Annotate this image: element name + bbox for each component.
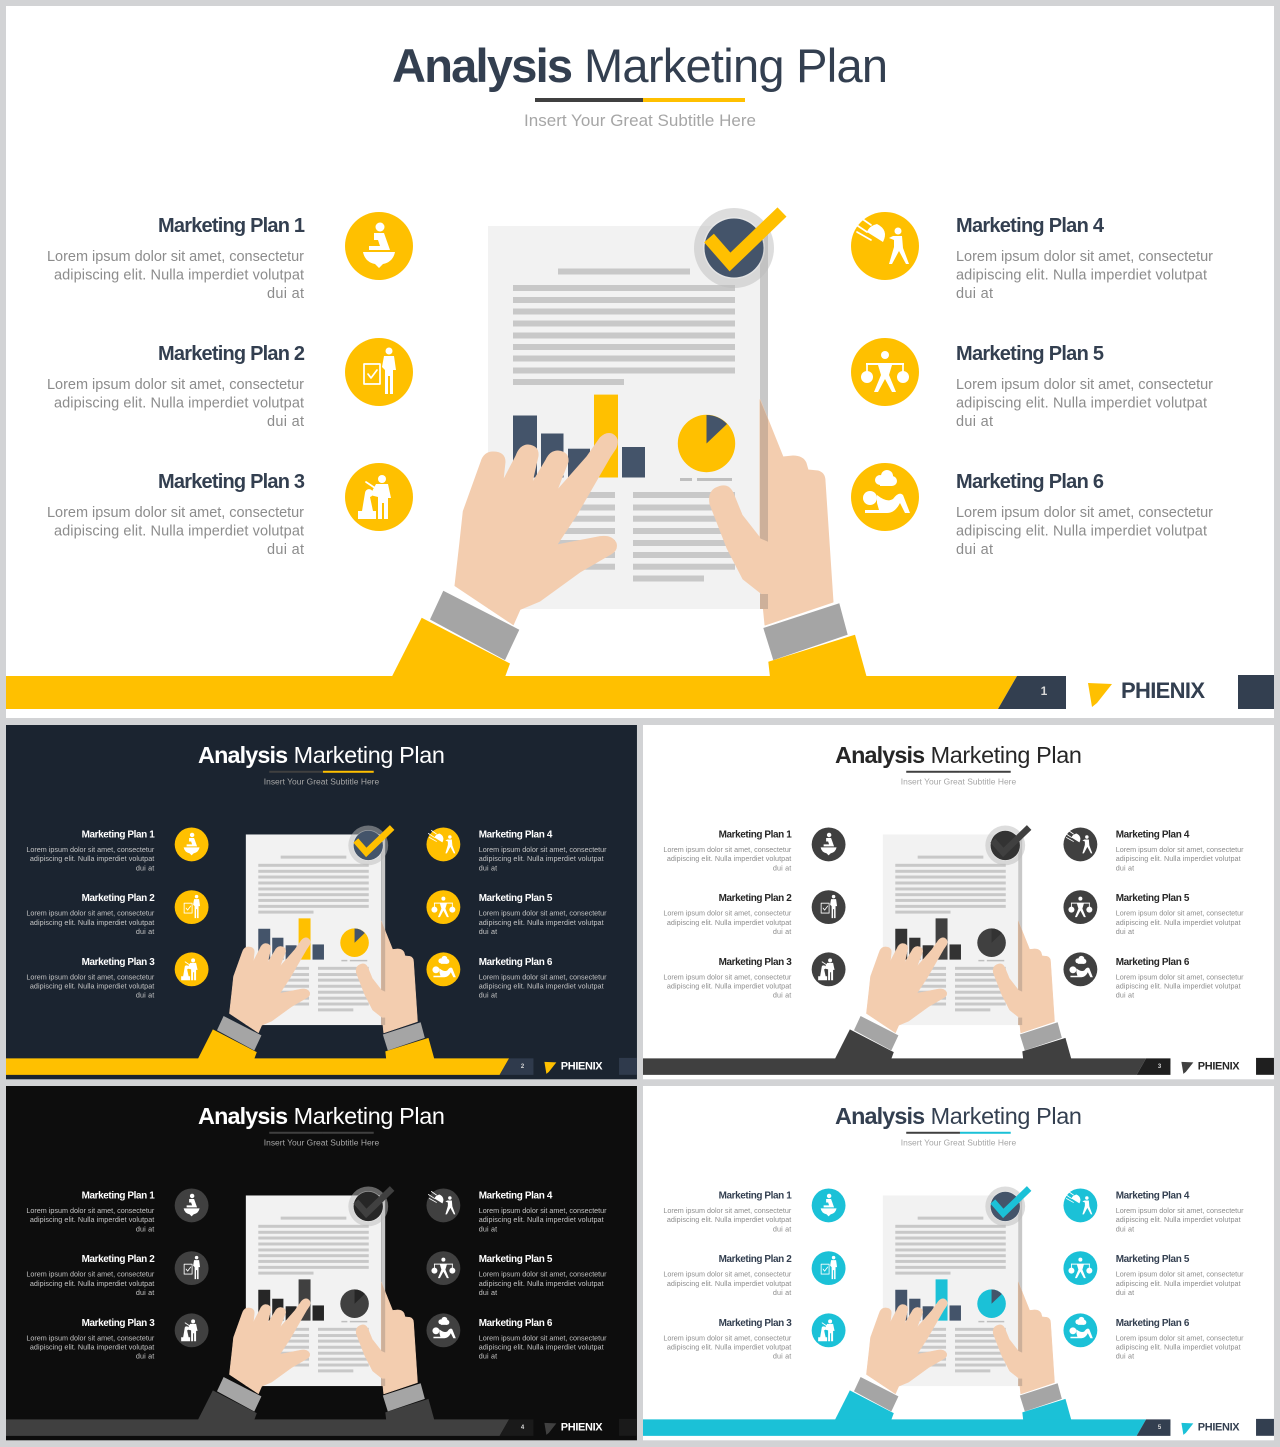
- item: Marketing Plan 6: dui at: [479, 1352, 497, 1361]
- item: Marketing Plan 4: dui at: [479, 863, 497, 872]
- pie chart: [678, 415, 735, 481]
- item: Marketing Plan 2: adipiscing elit. Nulla imperdiet volutpat: [30, 918, 154, 927]
- item: Marketing Plan 1: Lorem ipsum dolor sit amet, consectetur: [663, 1206, 792, 1215]
- item: Marketing Plan 1: [47, 215, 305, 302]
- item: Marketing Plan 2: [47, 343, 305, 430]
- item: Marketing Plan 2: Marketing Plan 2: [82, 893, 155, 904]
- item: Marketing Plan 2: adipiscing elit. Nulla imperdiet volutpat: [54, 396, 304, 412]
- item: Marketing Plan 5: dui at: [1116, 1288, 1134, 1297]
- illustration: document held by two hands: [835, 1187, 1071, 1420]
- item: Marketing Plan 3: adipiscing elit. Nulla imperdiet volutpat: [667, 981, 791, 990]
- title: Marketing Plan: [931, 1103, 1082, 1129]
- icon: plan 1: [345, 212, 413, 280]
- document text lines: [513, 268, 735, 385]
- title: Analysis: [835, 1103, 925, 1129]
- item: Marketing Plan 6: Lorem ipsum dolor sit amet, consectetur: [479, 1333, 607, 1342]
- item: Marketing Plan 5: adipiscing elit. Nulla imperdiet volutpat: [1116, 918, 1241, 927]
- logo mark: [544, 1423, 556, 1435]
- icon: plan 4: [1063, 828, 1097, 861]
- icon: plan 4: [851, 212, 919, 280]
- item: Marketing Plan 5: [1116, 1254, 1244, 1297]
- item: Marketing Plan 4: [479, 1190, 607, 1233]
- item: Marketing Plan 3: [26, 957, 155, 1000]
- document lower columns: [513, 492, 735, 582]
- item: Marketing Plan 3: adipiscing elit. Nulla imperdiet volutpat: [30, 1342, 154, 1351]
- footer page tab: [1137, 1058, 1170, 1075]
- footer bar: [643, 1058, 1146, 1075]
- title underline: [906, 771, 1011, 773]
- title: Marketing Plan: [294, 742, 445, 768]
- item: Marketing Plan 1: dui at: [136, 863, 154, 872]
- icon: plan 5: [851, 338, 919, 406]
- item: Marketing Plan 1: Lorem ipsum dolor sit amet, consectetur: [663, 845, 792, 854]
- item: Marketing Plan 2: Marketing Plan 2: [82, 1254, 155, 1265]
- item: Marketing Plan 4: adipiscing elit. Nulla imperdiet volutpat: [479, 1215, 604, 1224]
- subtitle: Insert Your Great Subtitle Here: [264, 1138, 379, 1148]
- item: Marketing Plan 4: adipiscing elit. Nulla imperdiet volutpat: [956, 268, 1207, 284]
- item: Marketing Plan 2: Lorem ipsum dolor sit amet, consectetur: [26, 1270, 155, 1279]
- icon: plan 3: [812, 952, 846, 986]
- item: Marketing Plan 2: [26, 893, 155, 936]
- item: Marketing Plan 2: Lorem ipsum dolor sit amet, consectetur: [26, 909, 155, 918]
- footer bar: [6, 1419, 509, 1436]
- item: Marketing Plan 1: Marketing Plan 1: [82, 1190, 155, 1201]
- footer corner block: [1256, 1419, 1274, 1436]
- icon: plan 5: [426, 890, 460, 924]
- title: Analysis: [835, 742, 925, 768]
- item: Marketing Plan 6: Lorem ipsum dolor sit amet, consectetur: [1116, 1333, 1244, 1342]
- title underline: [535, 98, 745, 102]
- logo text: PHIENIX: [1198, 1421, 1240, 1433]
- item: Marketing Plan 4: adipiscing elit. Nulla imperdiet volutpat: [479, 854, 604, 863]
- item: Marketing Plan 6: adipiscing elit. Nulla imperdiet volutpat: [1116, 981, 1241, 990]
- item: Marketing Plan 1: [663, 829, 792, 872]
- item: Marketing Plan 4: Lorem ipsum dolor sit amet, consectetur: [479, 1206, 607, 1215]
- item: Marketing Plan 3: Lorem ipsum dolor sit amet, consectetur: [47, 505, 304, 521]
- footer bar: [6, 676, 1017, 709]
- item: Marketing Plan 5: Lorem ipsum dolor sit amet, consectetur: [1116, 1270, 1244, 1279]
- item: Marketing Plan 4: Lorem ipsum dolor sit amet, consectetur: [956, 249, 1213, 265]
- title: Marketing Plan: [294, 1103, 445, 1129]
- item: Marketing Plan 1: dui at: [136, 1224, 154, 1233]
- item: Marketing Plan 4: Marketing Plan 4: [956, 215, 1105, 237]
- logo mark: [1181, 1423, 1193, 1435]
- item: Marketing Plan 3: adipiscing elit. Nulla imperdiet volutpat: [54, 524, 304, 540]
- item: Marketing Plan 6: [956, 471, 1213, 558]
- check badge: [694, 208, 782, 288]
- item: Marketing Plan 1: Marketing Plan 1: [158, 215, 305, 237]
- title: [198, 742, 445, 768]
- illustration: document held by two hands: [198, 826, 434, 1059]
- item: Marketing Plan 4: [956, 215, 1213, 302]
- item: Marketing Plan 3: Marketing Plan 3: [158, 471, 305, 493]
- item: Marketing Plan 5: [479, 1254, 607, 1297]
- item: Marketing Plan 1: dui at: [267, 286, 304, 302]
- icon: plan 4: [426, 828, 460, 861]
- item: Marketing Plan 3: dui at: [773, 1352, 791, 1361]
- item: Marketing Plan 2: [663, 893, 792, 936]
- logo mark: [1088, 683, 1112, 707]
- item: Marketing Plan 6: adipiscing elit. Nulla imperdiet volutpat: [1116, 1342, 1241, 1351]
- item: Marketing Plan 6: Lorem ipsum dolor sit amet, consectetur: [479, 972, 607, 981]
- item: Marketing Plan 5: dui at: [479, 927, 497, 936]
- icon: plan 1: [812, 1189, 846, 1222]
- icon: plan 2: [345, 338, 413, 406]
- item: Marketing Plan 4: Marketing Plan 4: [479, 829, 553, 840]
- item: Marketing Plan 5: [1116, 893, 1244, 936]
- item: Marketing Plan 5: [479, 893, 607, 936]
- logo text: PHIENIX: [561, 1060, 603, 1072]
- item: Marketing Plan 4: dui at: [479, 1224, 497, 1233]
- title underline: [269, 771, 374, 773]
- logo text: PHIENIX: [561, 1421, 603, 1433]
- item: Marketing Plan 3: Lorem ipsum dolor sit amet, consectetur: [26, 1333, 155, 1342]
- icon: plan 5: [1063, 890, 1097, 924]
- item: Marketing Plan 5: dui at: [1116, 927, 1134, 936]
- icon: plan 5: [1063, 1251, 1097, 1285]
- item: Marketing Plan 5: Lorem ipsum dolor sit amet, consectetur: [956, 377, 1213, 393]
- item: Marketing Plan 5: dui at: [479, 1288, 497, 1297]
- item: Marketing Plan 2: adipiscing elit. Nulla imperdiet volutpat: [30, 1279, 154, 1288]
- item: Marketing Plan 6: Marketing Plan 6: [1116, 957, 1190, 968]
- icon: plan 1: [175, 828, 209, 861]
- item: Marketing Plan 3: Marketing Plan 3: [82, 1318, 155, 1329]
- illustration: document held by two hands: [198, 1187, 434, 1420]
- page number: 3: [1158, 1064, 1162, 1070]
- item: Marketing Plan 4: dui at: [1116, 863, 1134, 872]
- icon: plan 6: [426, 1313, 460, 1347]
- item: Marketing Plan 3: Lorem ipsum dolor sit amet, consectetur: [663, 1333, 792, 1342]
- footer bar: [6, 1058, 509, 1075]
- item: Marketing Plan 5: adipiscing elit. Nulla imperdiet volutpat: [479, 918, 604, 927]
- item: Marketing Plan 3: Lorem ipsum dolor sit amet, consectetur: [26, 972, 155, 981]
- item: Marketing Plan 1: [26, 829, 155, 872]
- footer bar: [643, 1419, 1146, 1436]
- item: Marketing Plan 2: Lorem ipsum dolor sit amet, consectetur: [663, 909, 792, 918]
- item: Marketing Plan 4: Lorem ipsum dolor sit amet, consectetur: [1116, 845, 1244, 854]
- item: Marketing Plan 5: adipiscing elit. Nulla imperdiet volutpat: [956, 396, 1207, 412]
- item: Marketing Plan 1: adipiscing elit. Nulla imperdiet volutpat: [667, 1215, 791, 1224]
- item: Marketing Plan 5: adipiscing elit. Nulla imperdiet volutpat: [479, 1279, 604, 1288]
- icon: plan 3: [175, 952, 209, 986]
- footer corner block: [1256, 1058, 1274, 1075]
- item: Marketing Plan 6: adipiscing elit. Nulla imperdiet volutpat: [956, 524, 1207, 540]
- item: Marketing Plan 6: Marketing Plan 6: [479, 1318, 553, 1329]
- right hand: [710, 400, 833, 625]
- item: Marketing Plan 5: Marketing Plan 5: [1116, 1254, 1190, 1265]
- item: Marketing Plan 6: dui at: [1116, 1352, 1134, 1361]
- item: Marketing Plan 4: dui at: [956, 286, 993, 302]
- subtitle: Insert Your Great Subtitle Here: [901, 1138, 1016, 1148]
- item: Marketing Plan 5: Lorem ipsum dolor sit amet, consectetur: [479, 1270, 607, 1279]
- title: Marketing Plan: [931, 742, 1082, 768]
- item: Marketing Plan 4: adipiscing elit. Nulla imperdiet volutpat: [1116, 1215, 1241, 1224]
- item: Marketing Plan 3: [47, 471, 305, 558]
- logo mark: [544, 1062, 556, 1074]
- item: Marketing Plan 6: Marketing Plan 6: [956, 471, 1104, 493]
- item: Marketing Plan 1: Marketing Plan 1: [82, 829, 155, 840]
- item: Marketing Plan 2: [663, 1254, 792, 1297]
- item: Marketing Plan 4: [1116, 1190, 1244, 1233]
- item: Marketing Plan 3: Marketing Plan 3: [82, 957, 155, 968]
- title underline: [906, 1132, 1011, 1134]
- item: Marketing Plan 6: [479, 957, 607, 1000]
- item: Marketing Plan 3: adipiscing elit. Nulla imperdiet volutpat: [667, 1342, 791, 1351]
- title: Analysis: [392, 39, 573, 92]
- footer page tab: [500, 1058, 533, 1075]
- item: Marketing Plan 3: Marketing Plan 3: [719, 957, 792, 968]
- item: Marketing Plan 3: dui at: [136, 1352, 154, 1361]
- item: Marketing Plan 4: Marketing Plan 4: [479, 1190, 553, 1201]
- illustration: document held by two hands: [392, 208, 867, 677]
- item: Marketing Plan 6: Lorem ipsum dolor sit amet, consectetur: [1116, 972, 1244, 981]
- item: Marketing Plan 6: adipiscing elit. Nulla imperdiet volutpat: [479, 1342, 604, 1351]
- icon: plan 3: [812, 1313, 846, 1347]
- item: Marketing Plan 3: dui at: [267, 542, 304, 558]
- item: Marketing Plan 4: Lorem ipsum dolor sit amet, consectetur: [1116, 1206, 1244, 1215]
- icon: plan 6: [1063, 952, 1097, 986]
- item: Marketing Plan 5: [956, 343, 1213, 430]
- item: Marketing Plan 1: Lorem ipsum dolor sit amet, consectetur: [26, 845, 155, 854]
- item: Marketing Plan 6: Marketing Plan 6: [1116, 1318, 1190, 1329]
- right shirt cuff: [763, 603, 848, 660]
- title underline: [269, 1132, 374, 1134]
- footer corner block: [1238, 675, 1274, 709]
- item: Marketing Plan 5: Marketing Plan 5: [479, 1254, 553, 1265]
- title: Analysis: [198, 1103, 288, 1129]
- item: Marketing Plan 3: adipiscing elit. Nulla imperdiet volutpat: [30, 981, 154, 990]
- item: Marketing Plan 3: [663, 1318, 792, 1361]
- item: Marketing Plan 4: adipiscing elit. Nulla imperdiet volutpat: [1116, 854, 1241, 863]
- page number: 1: [1041, 684, 1048, 698]
- icon: plan 6: [851, 463, 919, 531]
- icon: plan 1: [812, 828, 846, 861]
- subtitle: Insert Your Great Subtitle Here: [524, 111, 756, 130]
- logo text: PHIENIX: [1198, 1060, 1240, 1072]
- item: Marketing Plan 5: Lorem ipsum dolor sit amet, consectetur: [1116, 909, 1244, 918]
- item: Marketing Plan 4: Marketing Plan 4: [1116, 829, 1190, 840]
- illustration: document held by two hands: [835, 826, 1071, 1059]
- subtitle: Insert Your Great Subtitle Here: [264, 777, 379, 787]
- icon: plan 2: [175, 890, 209, 924]
- item: Marketing Plan 1: dui at: [773, 1224, 791, 1233]
- item: Marketing Plan 2: Lorem ipsum dolor sit amet, consectetur: [47, 377, 304, 393]
- right sleeve: [768, 635, 867, 677]
- icon: plan 2: [812, 1251, 846, 1285]
- item: Marketing Plan 3: Marketing Plan 3: [719, 1318, 792, 1329]
- item: Marketing Plan 4: Marketing Plan 4: [1116, 1190, 1190, 1201]
- footer page tab: [1137, 1419, 1170, 1436]
- slide 2: yellow on navy: [6, 725, 637, 1079]
- item: Marketing Plan 2: dui at: [136, 927, 154, 936]
- footer page tab: [500, 1419, 533, 1436]
- item: Marketing Plan 6: [479, 1318, 607, 1361]
- item: Marketing Plan 4: [479, 829, 607, 872]
- icon: plan 3: [175, 1313, 209, 1347]
- item: Marketing Plan 6: Lorem ipsum dolor sit amet, consectetur: [956, 505, 1213, 521]
- icon: plan 6: [1063, 1313, 1097, 1347]
- item: Marketing Plan 4: Lorem ipsum dolor sit amet, consectetur: [479, 845, 607, 854]
- left shirt cuff: [430, 591, 519, 660]
- item: Marketing Plan 2: dui at: [136, 1288, 154, 1297]
- icon: plan 4: [426, 1189, 460, 1222]
- item: Marketing Plan 4: [1116, 829, 1244, 872]
- bar chart: [513, 395, 645, 478]
- icon: plan 4: [1063, 1189, 1097, 1222]
- item: Marketing Plan 3: dui at: [773, 991, 791, 1000]
- item: Marketing Plan 1: [663, 1190, 792, 1233]
- icon: plan 1: [175, 1189, 209, 1222]
- item: Marketing Plan 6: [1116, 957, 1244, 1000]
- item: Marketing Plan 2: Marketing Plan 2: [719, 1254, 792, 1265]
- item: Marketing Plan 2: dui at: [773, 1288, 791, 1297]
- slide 4: charcoal on black: [6, 1086, 637, 1440]
- item: Marketing Plan 5: Marketing Plan 5: [1116, 893, 1190, 904]
- item: Marketing Plan 1: Lorem ipsum dolor sit amet, consectetur: [47, 249, 304, 265]
- page number: 2: [521, 1064, 525, 1070]
- footer page tab: [998, 676, 1066, 709]
- title: [835, 742, 1082, 768]
- item: Marketing Plan 5: Lorem ipsum dolor sit amet, consectetur: [479, 909, 607, 918]
- item: Marketing Plan 5: Marketing Plan 5: [479, 893, 553, 904]
- title: [392, 39, 888, 92]
- item: Marketing Plan 3: [663, 957, 792, 1000]
- title: Analysis: [198, 742, 288, 768]
- item: Marketing Plan 1: Marketing Plan 1: [719, 1190, 792, 1201]
- item: Marketing Plan 1: Marketing Plan 1: [719, 829, 792, 840]
- document sheet: [488, 226, 768, 609]
- item: Marketing Plan 5: adipiscing elit. Nulla imperdiet volutpat: [1116, 1279, 1241, 1288]
- footer corner block: [619, 1058, 637, 1075]
- icon: plan 3: [345, 463, 413, 531]
- item: Marketing Plan 1: [26, 1190, 155, 1233]
- icon: plan 2: [175, 1251, 209, 1285]
- item: Marketing Plan 6: dui at: [956, 542, 993, 558]
- left hand: [455, 434, 617, 625]
- item: Marketing Plan 6: [1116, 1318, 1244, 1361]
- logo mark: [1181, 1062, 1193, 1074]
- item: Marketing Plan 1: Lorem ipsum dolor sit amet, consectetur: [26, 1206, 155, 1215]
- item: Marketing Plan 6: dui at: [1116, 991, 1134, 1000]
- icon: plan 5: [426, 1251, 460, 1285]
- item: Marketing Plan 5: Marketing Plan 5: [956, 343, 1104, 365]
- left sleeve: [392, 618, 510, 677]
- slide 1: yellow on white: [6, 6, 1274, 718]
- item: Marketing Plan 5: dui at: [956, 414, 993, 430]
- icon: plan 6: [426, 952, 460, 986]
- footer corner block: [619, 1419, 637, 1436]
- item: Marketing Plan 4: dui at: [1116, 1224, 1134, 1233]
- icon: plan 2: [812, 890, 846, 924]
- subtitle: Insert Your Great Subtitle Here: [901, 777, 1016, 787]
- slide 5: cyan on white: [643, 1086, 1274, 1440]
- item: Marketing Plan 3: [26, 1318, 155, 1361]
- title: [835, 1103, 1082, 1129]
- item: Marketing Plan 6: Marketing Plan 6: [479, 957, 553, 968]
- logo text: PHIENIX: [1121, 678, 1205, 703]
- item: Marketing Plan 2: Marketing Plan 2: [158, 343, 305, 365]
- item: Marketing Plan 1: adipiscing elit. Nulla imperdiet volutpat: [30, 1215, 154, 1224]
- item: Marketing Plan 2: adipiscing elit. Nulla imperdiet volutpat: [667, 1279, 791, 1288]
- page number: 4: [521, 1425, 525, 1431]
- item: Marketing Plan 2: dui at: [773, 927, 791, 936]
- slide 3: charcoal on white: [643, 725, 1274, 1079]
- item: Marketing Plan 1: adipiscing elit. Nulla imperdiet volutpat: [667, 854, 791, 863]
- item: Marketing Plan 2: Lorem ipsum dolor sit amet, consectetur: [663, 1270, 792, 1279]
- title: Marketing Plan: [584, 39, 888, 92]
- item: Marketing Plan 1: dui at: [773, 863, 791, 872]
- item: Marketing Plan 6: adipiscing elit. Nulla imperdiet volutpat: [479, 981, 604, 990]
- item: Marketing Plan 6: dui at: [479, 991, 497, 1000]
- page number: 5: [1158, 1425, 1162, 1431]
- title: [198, 1103, 445, 1129]
- item: Marketing Plan 2: adipiscing elit. Nulla imperdiet volutpat: [667, 918, 791, 927]
- item: Marketing Plan 2: [26, 1254, 155, 1297]
- item: Marketing Plan 2: dui at: [267, 414, 304, 430]
- item: Marketing Plan 1: adipiscing elit. Nulla imperdiet volutpat: [30, 854, 154, 863]
- item: Marketing Plan 3: dui at: [136, 991, 154, 1000]
- item: Marketing Plan 3: Lorem ipsum dolor sit amet, consectetur: [663, 972, 792, 981]
- item: Marketing Plan 2: Marketing Plan 2: [719, 893, 792, 904]
- item: Marketing Plan 1: adipiscing elit. Nulla imperdiet volutpat: [54, 268, 304, 284]
